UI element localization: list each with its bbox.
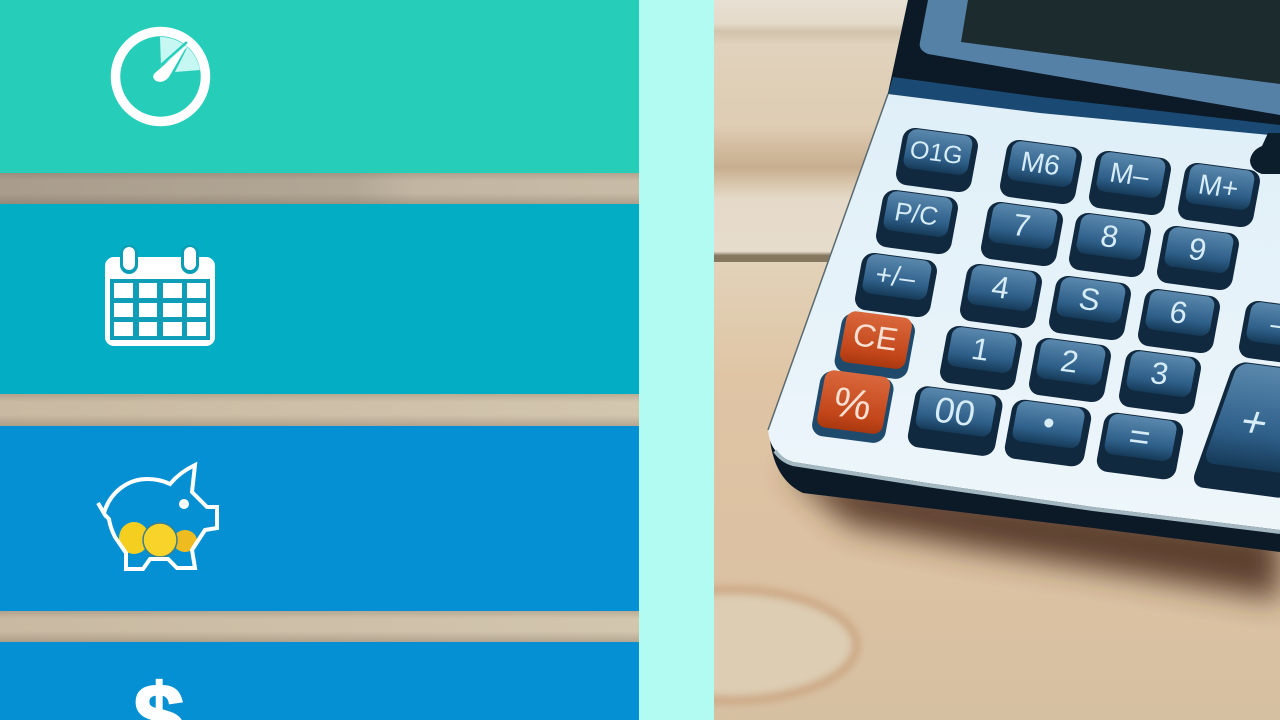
wood strip 2 (0, 394, 639, 426)
key 8: 8 (1098, 218, 1121, 255)
icon: calendar (105, 245, 215, 346)
panel: timer (0, 0, 639, 173)
key M6: M6 (1018, 146, 1063, 181)
key 1: 1 (969, 331, 992, 368)
photo: wooden desk with calculator (714, 0, 1280, 720)
calculator underside (770, 0, 1280, 552)
key M6 (998, 138, 1084, 206)
key 6: 6 (1167, 294, 1190, 331)
key S (1047, 274, 1133, 342)
key percent orange: % (830, 378, 875, 429)
key minus (1237, 299, 1280, 367)
icon: timer gauge (116, 32, 206, 122)
key 3: 3 (1148, 355, 1171, 392)
key M minus: M– (1107, 157, 1152, 192)
key plus-minus (853, 251, 939, 319)
key 4 (958, 262, 1044, 330)
key 00 (906, 385, 1004, 457)
wood strip 3 (0, 611, 639, 642)
key equals (1095, 411, 1185, 481)
key P/C: P/C (892, 196, 941, 231)
key M plus (1176, 161, 1262, 229)
key 7 (979, 200, 1065, 268)
wood tabletop, lower plank (714, 262, 1280, 720)
key 00: 00 (931, 389, 979, 434)
key 9: 9 (1186, 231, 1209, 268)
wood tabletop, upper plank (714, 0, 1280, 262)
wood strip 1 (0, 173, 639, 204)
key 3 (1117, 348, 1203, 416)
key CE orange: CE (850, 316, 901, 358)
key M minus (1087, 149, 1173, 217)
key O1G: O1G (908, 136, 965, 170)
key O1G (894, 126, 980, 194)
panel: money (0, 642, 639, 720)
key M plus: M+ (1196, 169, 1241, 204)
key CE orange (833, 310, 917, 380)
key 1 (938, 324, 1024, 392)
key equals: = (1126, 415, 1154, 458)
screen bezel (920, 0, 1280, 115)
key percent orange (810, 369, 896, 444)
key 2 (1027, 336, 1113, 404)
wood knot grain (604, 590, 856, 700)
calculator body (768, 0, 1280, 552)
key 4: 4 (989, 269, 1012, 306)
key 7: 7 (1010, 207, 1033, 244)
key 9 (1155, 224, 1241, 292)
panel: calendar (0, 204, 639, 394)
panel: savings (0, 426, 639, 611)
calculator display (961, 0, 1280, 84)
icon: piggy bank with coins (98, 465, 217, 569)
key plus-minus: +/– (873, 259, 918, 294)
face bottom edge (775, 451, 1280, 532)
key plus tall (1190, 361, 1280, 499)
key 6 (1136, 287, 1222, 355)
key decimal point (1003, 398, 1093, 468)
key S: S (1076, 281, 1103, 318)
key P/C (874, 188, 960, 256)
side knob (1250, 133, 1280, 174)
key plus tall: + (1233, 398, 1275, 448)
key 2: 2 (1058, 343, 1081, 380)
bezel blue stripe (888, 77, 1280, 137)
calculator face (768, 94, 1280, 530)
aqua divider column (638, 0, 714, 720)
face left edge line (768, 94, 888, 430)
calculator cast shadow (785, 470, 1280, 600)
key 8 (1067, 211, 1153, 279)
